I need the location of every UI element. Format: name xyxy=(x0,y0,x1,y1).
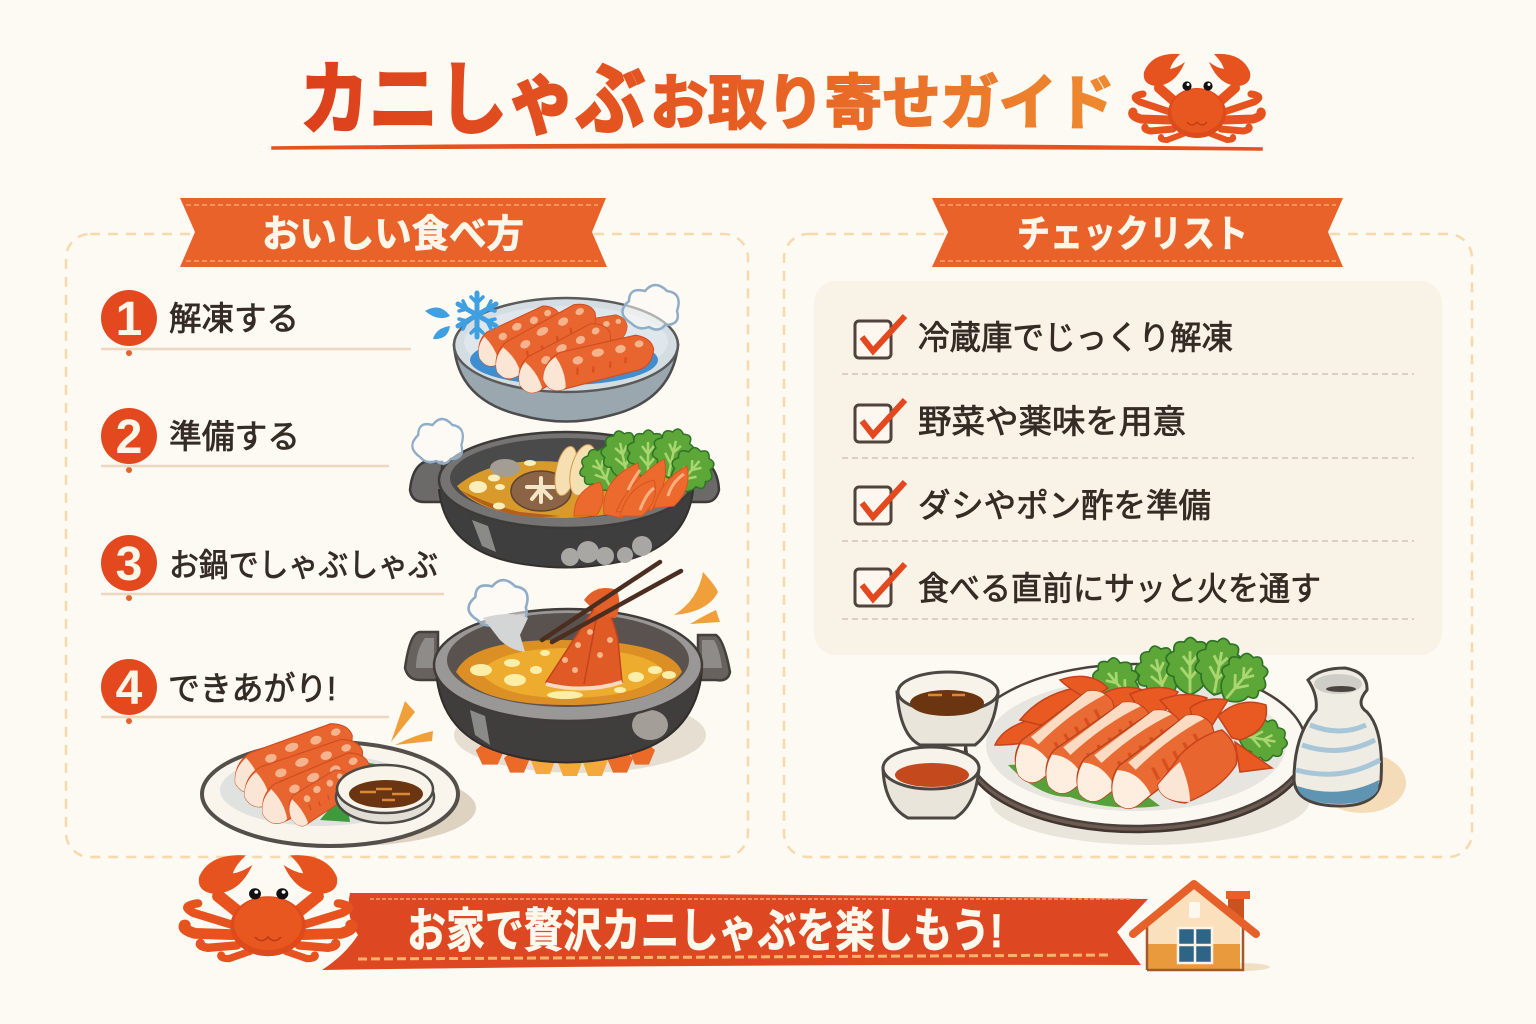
check item 2: 野菜や薬味を用意 xyxy=(918,403,1186,440)
steam xyxy=(412,419,463,464)
lettuce xyxy=(1008,634,1291,808)
crab legs xyxy=(1002,683,1126,788)
steam xyxy=(469,580,528,652)
sake bottle xyxy=(1294,668,1406,813)
sauce bowl bottom xyxy=(883,747,979,818)
title text: large part: カニしゃぶ xyxy=(300,55,645,144)
step 1: 1 xyxy=(116,293,142,346)
step 1 xyxy=(101,290,411,356)
footer banner xyxy=(322,893,1148,970)
icon: snowflake xyxy=(458,293,496,337)
crab meat on chopsticks xyxy=(546,600,622,688)
step 3: お鍋でしゃぶしゃぶ xyxy=(169,547,438,583)
step 2: 2 xyxy=(116,411,142,464)
sauce bowl top xyxy=(897,672,998,745)
illustration: finished plate xyxy=(202,701,476,846)
step 4: 4 xyxy=(116,662,143,715)
check item 1 xyxy=(842,316,1414,374)
step 2: 準備する xyxy=(169,418,300,455)
illustration: crab platter xyxy=(883,634,1406,845)
panel frame xyxy=(66,234,748,857)
pot smoke xyxy=(561,536,652,566)
lettuce xyxy=(573,425,723,503)
icon: house xyxy=(1133,884,1270,971)
check item 2 xyxy=(842,400,1414,458)
step 4: できあがり! xyxy=(168,670,336,707)
icon: footer crab xyxy=(184,855,352,959)
sparkles xyxy=(674,572,720,624)
claw pieces xyxy=(995,676,1272,772)
check item 3: ダシやポン酢を準備 xyxy=(918,487,1211,524)
ribbon heading: checklist xyxy=(932,198,1343,267)
step 3: 3 xyxy=(116,538,142,591)
step 1: 解凍する xyxy=(169,300,299,337)
step 3 xyxy=(101,535,444,601)
check item 4: 食べる直前にサッと火を通す xyxy=(918,570,1321,607)
ribbon heading: how to eat: おいしい食べ方 xyxy=(262,214,524,256)
title text: small part: お取り寄せガイド xyxy=(650,70,1115,137)
illustration: shabu-shabu pot xyxy=(405,562,730,776)
check item 1: 冷蔵庫でじっくり解凍 xyxy=(918,319,1233,356)
dipping dish xyxy=(336,771,434,823)
checklist card xyxy=(814,281,1442,655)
panel frame xyxy=(784,234,1472,857)
footer banner: お家で贅沢カニしゃぶを楽しもう! xyxy=(407,904,1003,957)
chopsticks xyxy=(542,562,681,642)
icon: steam xyxy=(622,285,679,330)
green onion slices xyxy=(551,442,601,498)
check item 4 xyxy=(842,564,1414,619)
check item 3 xyxy=(842,482,1414,541)
mushroom xyxy=(511,471,571,511)
title underline xyxy=(272,144,1262,150)
ribbon heading: checklist: チェックリスト xyxy=(1017,214,1248,256)
panel: how to eat xyxy=(66,198,748,857)
step 2 xyxy=(101,408,389,473)
ribbon heading: how to eat xyxy=(180,198,607,267)
icon: title crab xyxy=(1133,54,1261,140)
illustration: prepared pot xyxy=(410,419,723,568)
panel: checklist xyxy=(784,198,1472,857)
crab pieces xyxy=(574,459,688,518)
sparkles xyxy=(391,701,433,745)
illustration: thawing bowl xyxy=(425,285,679,422)
step 4 xyxy=(101,659,389,724)
icon: water drops xyxy=(425,307,450,339)
flames xyxy=(476,738,655,776)
title xyxy=(272,55,1262,150)
